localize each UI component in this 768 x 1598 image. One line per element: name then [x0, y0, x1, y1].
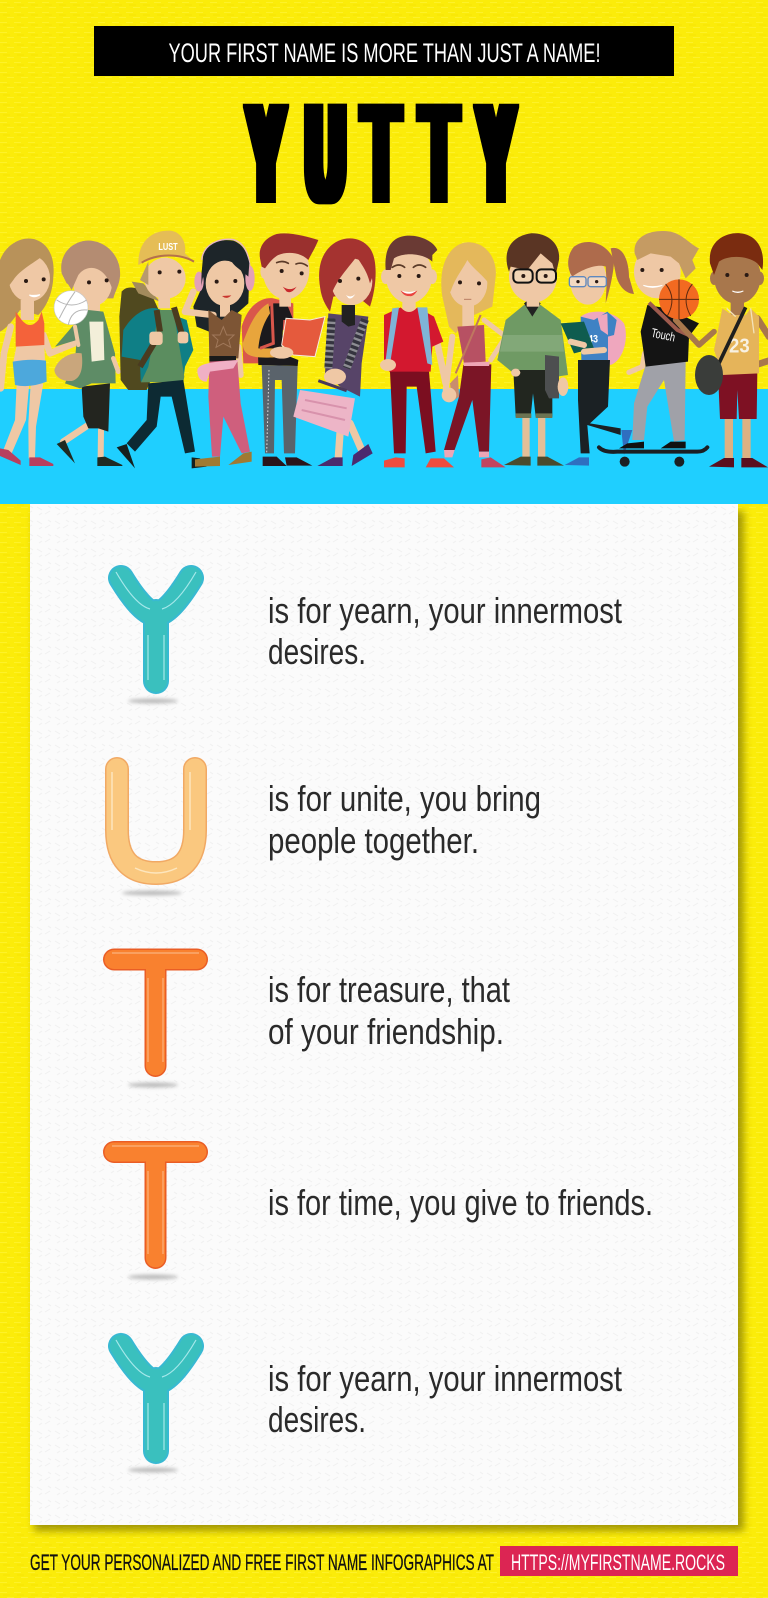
row 3: letter T: [112, 953, 510, 1088]
person: girl with volleyball: [54, 241, 122, 466]
row 1: letter Y: [116, 572, 622, 704]
row 4: letter T: [112, 1146, 653, 1280]
name title: Y: [478, 75, 514, 232]
person: boy in yellow jersey with shoulder bag: [676, 233, 768, 467]
person: boy with book: [242, 233, 325, 466]
person: blonde girl: [441, 242, 506, 467]
row 3: letter T: is for treasure, that: [268, 969, 510, 1010]
person: boy in yellow jersey with shoulder bag: 23: [729, 335, 750, 358]
right group of illustrated people: [380, 231, 768, 467]
name title: [248, 75, 514, 232]
panel drop shadow: [34, 511, 744, 1531]
footer call to action: GET YOUR PERSONALIZED AND FREE FIRST NAME INFOGRAPHICS AT: [30, 1550, 494, 1575]
person: boy with glasses: [497, 233, 568, 466]
blue band edge cover: [0, 489, 768, 504]
person: skater with basketball: Touch: [650, 326, 676, 345]
person: red haired girl with bag: [293, 238, 376, 466]
basketball: [659, 279, 699, 319]
name title: Y: [248, 75, 284, 232]
row 1: letter Y: is for yearn, your innermost: [268, 590, 622, 631]
person: girl in orange top: [0, 239, 78, 466]
row 3: letter T: of your friendship.: [268, 1011, 504, 1052]
row 2: letter U: people together.: [268, 820, 479, 861]
left group of illustrated people: [0, 231, 376, 468]
row 2: letter U: is for unite, you bring: [268, 778, 541, 819]
header banner: [94, 26, 674, 76]
row 1: letter Y: desires.: [268, 631, 366, 672]
name title: U: [307, 75, 344, 232]
person: girl with headphones: [185, 239, 255, 467]
person: skater with basketball: [599, 231, 707, 467]
person: girl with tablet and pink backpack: [561, 242, 634, 466]
person: boy with cap and backpack: LUST: [158, 242, 178, 253]
row 5: letter Y: [116, 1340, 622, 1472]
row 5: letter Y: desires.: [268, 1399, 366, 1440]
white textured panel: [30, 504, 738, 1525]
row 4: letter T: is for time, you give to friends.: [268, 1182, 653, 1223]
name title: T: [419, 76, 459, 232]
person: girl with tablet and pink backpack: 43: [588, 334, 598, 346]
name title: T: [361, 76, 401, 232]
person: boy in red shirt: [380, 236, 454, 467]
row 5: letter Y: is for yearn, your innermost: [268, 1358, 622, 1399]
blue floor band: [0, 389, 768, 504]
row 2: letter U: [112, 769, 541, 896]
person: boy with cap and backpack: [117, 231, 207, 468]
